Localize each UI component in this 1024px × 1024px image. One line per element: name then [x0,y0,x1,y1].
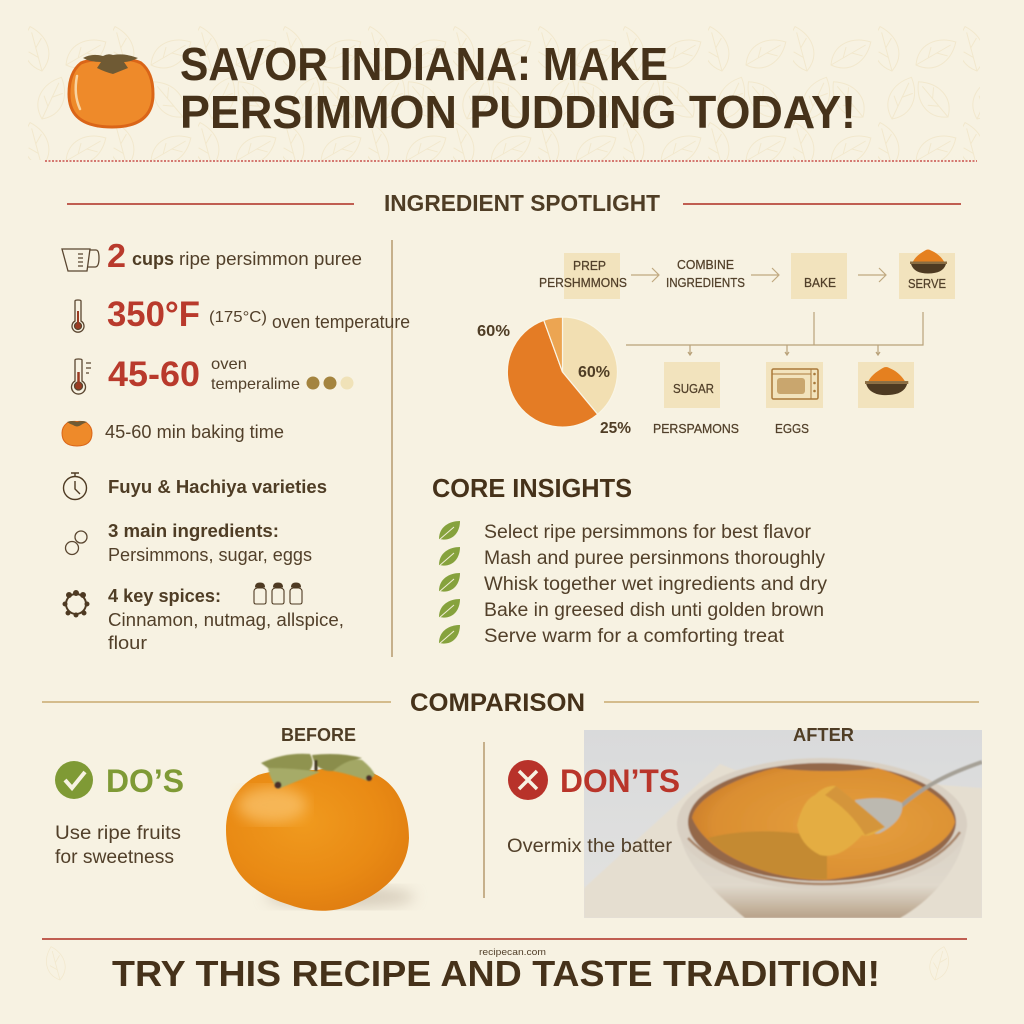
icon: spice shakers [254,583,302,604]
insight 4: Bake in greesed dish unti golden brown [484,600,824,621]
panel: do's: DO’S [106,763,184,799]
icon: check [55,761,93,799]
pie chart: 60% [477,323,510,340]
title [180,38,856,138]
before image: whole persimmon [226,754,415,911]
fact: main ingredients: 3 main ingredients: [108,521,279,541]
fact: cups: 2 [107,237,126,274]
title: PERSIMMON PUDDING TODAY! [180,86,856,138]
panel: don'ts: DON’TS [560,763,680,799]
fact: main ingredients [66,521,312,565]
heading: CORE INSIGHTS [432,473,632,503]
icon: spice ring [64,591,88,616]
pie chart: 60% [578,364,610,381]
box: sugar [664,362,720,408]
fact: varieties [64,473,327,500]
icon: cross [508,760,548,800]
bowl [677,758,982,918]
title: SAVOR INDIANA: MAKE [180,38,668,90]
icon: stopwatch [64,473,86,500]
pie chart: 25% [600,420,631,437]
rating dots [306,376,354,390]
before label: BEFORE [281,725,356,745]
fact: varieties: Fuyu & Hachiya varieties [108,477,327,497]
fact: temperature: (175°C) [209,309,267,326]
step: combine: INGREDIENTS [666,275,745,290]
fact: cups: ripe persimmon puree [179,249,362,269]
fact: time range: temperalime [211,376,300,393]
heading: ingredient spotlight: INGREDIENT SPOTLIGHT [384,190,660,216]
fact: spices: flour [108,633,147,653]
step: serve [899,250,955,299]
label: persimmons: PERSPAMONS [653,421,739,436]
icon: small persimmon [62,421,92,446]
leaf background pattern [28,25,980,160]
after image: baked pudding [584,730,982,918]
icon: thermometer with ticks [72,359,91,394]
fact: temperature: oven temperature [272,312,410,332]
fact: spices: 4 key spices: [108,586,221,606]
step: prep: PERSHMMONS [539,275,627,290]
fact: temperature [72,295,410,334]
fact: spices [64,583,344,653]
step: serve: SERVE [908,276,946,291]
fact: baking time [62,421,284,446]
icon: thermometer [72,300,84,332]
pudding scoop [797,786,885,856]
pie chart [477,317,631,437]
fact: main ingredients: Persimmons, sugar, eggs [108,545,312,565]
step: combine: COMBINE [677,257,734,272]
napkin [584,764,982,918]
pudding [692,768,955,880]
insight 3: Whisk together wet ingredients and dry [484,574,828,595]
source credit: recipecan.com [479,947,546,958]
fact: cups: cups [132,249,174,269]
step: prep [539,253,627,299]
header banner [28,25,980,160]
box: oven [766,362,823,408]
box: sugar: SUGAR [673,381,714,396]
spoon [900,762,982,807]
connector lines [626,312,923,355]
panel: core insights [432,473,828,647]
step: bake [791,253,847,299]
panel: do's [55,761,184,868]
icon: circles [66,531,87,554]
step: prep: PREP [573,258,606,273]
heading: comparison: COMPARISON [410,689,585,717]
box: bowl [858,362,914,408]
insight 2: Mash and puree persinmons thoroughly [484,548,826,569]
panel: do's: Use ripe fruits [55,823,181,844]
panel: key facts [62,237,410,653]
call to action: TRY THIS RECIPE AND TASTE TRADITION! [112,953,880,994]
panel: do's: for sweetness [55,847,174,868]
arrow [858,268,886,282]
icon: persimmon [69,54,153,127]
after label: AFTER [793,725,854,745]
fact: baking time: 45-60 min baking time [105,422,284,442]
arrow [631,268,659,282]
fact: time range: 45-60 [108,355,200,394]
label: eggs: EGGS [775,421,809,436]
icon: measuring cup [62,249,99,271]
step: combine [666,257,745,290]
footer [42,939,967,994]
fact: cups [62,237,362,274]
arrow [751,268,779,282]
step: bake: BAKE [804,275,836,290]
calyx [261,754,375,789]
fact: temperature: 350°F [107,295,200,334]
flow diagram [539,250,955,436]
fact: time range: oven [211,356,247,373]
insight 5: Serve warm for a comforting treat [484,626,785,647]
panel: don'ts: Overmix the batter [507,836,673,857]
fact: spices: Cinnamon, nutmag, allspice, [108,610,344,630]
insight 1: Select ripe persimmons for best flavor [484,522,812,543]
fact: time range [72,355,354,394]
panel: don'ts [507,760,680,857]
